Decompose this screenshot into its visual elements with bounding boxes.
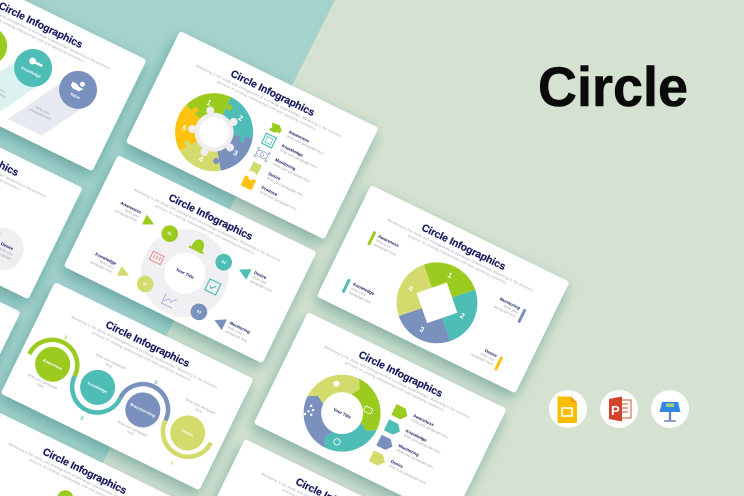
- step numbers: 3: [153, 379, 158, 386]
- circle: desire: [164, 410, 211, 456]
- card: desire circle partial: [0, 91, 83, 299]
- label: desire: Desire: [484, 348, 498, 358]
- label: awareness: Write your: [124, 208, 141, 219]
- label: knowledge: Write your: [350, 286, 367, 297]
- card subtitle: [258, 472, 408, 496]
- captions: here: [195, 407, 203, 414]
- label: desire: paragraph here: [249, 279, 273, 293]
- circle: knowledge: Knowledge: [87, 380, 109, 395]
- label: awareness: paragraph here: [373, 243, 397, 257]
- label: monitoring: Monitoring: [398, 443, 420, 457]
- captions: Write your paragraph: [185, 397, 216, 415]
- triangle: knowledge: [117, 266, 132, 281]
- card title: Circle Infographics: [41, 447, 128, 496]
- label: monitoring: Write your: [503, 304, 519, 315]
- legend: monitoring: Monitoring: [274, 157, 297, 171]
- step 01: 01: [167, 230, 174, 237]
- label: knowledge: Knowledge: [352, 282, 376, 296]
- circle: desire: Desire: [181, 428, 195, 438]
- label: awareness: Awareness: [377, 234, 400, 248]
- label: monitoring: Write your paragraph here: [396, 448, 434, 469]
- label: knowledge: paragraph here: [348, 291, 372, 305]
- icon: camera: [269, 122, 283, 135]
- puzzle ring chart: 4: [197, 154, 206, 164]
- icon: check box: [205, 279, 221, 295]
- step numbers: 1: [63, 334, 68, 341]
- gray circle: [0, 221, 31, 277]
- card title: Circle Infographics: [420, 223, 507, 273]
- card subtitle: Marketing is the study and management of exchange relationships. Marketing is the business: [324, 345, 471, 420]
- captions: here: [37, 382, 45, 389]
- label: awareness: Awareness: [412, 413, 435, 428]
- legend: desire: Desire: [268, 171, 282, 182]
- circle: brainstorming: Brainstorming: [129, 402, 157, 418]
- icon: Google Slides: [549, 390, 587, 428]
- step 01: [159, 223, 181, 245]
- tag: desire: [369, 450, 387, 468]
- card subtitle: Marketing is the study and management of exchange relationships. Marketing is the business: [134, 188, 281, 263]
- step 02: 02: [142, 281, 149, 287]
- circle: knowledge: [74, 364, 121, 411]
- triangle marker: [0, 225, 3, 239]
- label: knowledge: Write your paragraph here: [403, 433, 441, 455]
- snake line: [18, 331, 222, 465]
- bar: desire: [494, 356, 503, 371]
- label: awareness: [115, 200, 143, 223]
- icon: Keynote: [651, 390, 689, 428]
- legend: knowledge: Write your paragraph here: [279, 148, 318, 170]
- captions: Write your paragraph: [117, 420, 148, 438]
- card: snake path: [1, 282, 254, 490]
- circle: knowledge: Knowledge: [20, 65, 43, 79]
- label: monitoring: Write your: [227, 325, 244, 336]
- card subtitle: Marketing is the study and management of exchange relationships. Marketing is the business: [387, 218, 534, 293]
- puzzle ring chart: [162, 80, 266, 184]
- band captions: [0, 81, 54, 121]
- triangle: desire: [236, 264, 252, 280]
- card subtitle: Marketing is the study and management of exchange relationships. Marketing is the business: [71, 315, 218, 390]
- label: awareness: Write your: [375, 239, 392, 250]
- arrow ring chart: Your Title: [332, 407, 352, 420]
- card: rotary cycle: [64, 155, 317, 363]
- legend: awareness: Write your paragraph here: [286, 134, 324, 156]
- icon: box: [241, 175, 256, 190]
- icon: bell: [189, 237, 208, 254]
- gray ring with center title: [126, 214, 244, 332]
- pie chart: 3: [418, 324, 426, 334]
- label: monitoring: paragraph here: [493, 305, 517, 319]
- green circle: [55, 487, 76, 496]
- step 04: 04: [221, 259, 228, 266]
- pie chart: 1: [446, 270, 454, 280]
- bar: knowledge: [342, 278, 351, 293]
- band captions: Write your: [35, 105, 52, 116]
- label: knowledge: Knowledge: [94, 251, 118, 266]
- card title: Circle Infographics: [229, 69, 316, 119]
- card title: Circle Infographics: [357, 350, 444, 400]
- circle: awareness: [29, 341, 76, 388]
- step numbers: 2: [79, 415, 85, 422]
- circle: value: Value: [69, 91, 82, 101]
- label: monitoring: Monitoring: [499, 296, 521, 311]
- card subtitle: Marketing is the study and management of exchange relationships. Marketing is the business: [196, 64, 343, 139]
- label: monitoring: [493, 296, 522, 319]
- step 03: 03: [196, 308, 203, 315]
- card: three circles with shadows: [0, 0, 147, 171]
- label: awareness: [373, 234, 401, 257]
- step numbers: [34, 334, 204, 467]
- label: desire: [470, 343, 499, 367]
- label: desire: [249, 270, 277, 293]
- captions: Write your paragraph: [95, 353, 126, 371]
- card: bottom left: [0, 409, 191, 496]
- card title: Circle Infographics: [104, 320, 191, 370]
- icon: red bars: [149, 251, 164, 265]
- captions: Write your paragraph: [27, 373, 58, 391]
- label: desire: Desire: [253, 270, 268, 280]
- band captions: paragraph here: [28, 107, 52, 121]
- card: bottom center: [191, 439, 444, 496]
- puzzle ring chart: 2: [237, 113, 244, 123]
- desire label: Desire: [0, 241, 15, 252]
- pie chart: 2: [459, 311, 466, 321]
- card subtitle: process of creating relationships with and satisfying customers.: [345, 361, 445, 413]
- long shadow bands: [0, 27, 93, 149]
- legend: desire: Write your paragraph here: [266, 176, 304, 197]
- card subtitle: process of creating relationships with and satisfying customers.: [92, 331, 192, 383]
- legend: monitoring: Write your paragraph here: [272, 162, 311, 184]
- bar: awareness: [367, 231, 376, 246]
- label: monitoring: [225, 320, 253, 343]
- step 04: [213, 251, 235, 273]
- captions: [24, 330, 217, 464]
- icon: badge: [249, 162, 262, 175]
- triangle: awareness: [142, 215, 157, 229]
- icon: eye network: [254, 147, 271, 162]
- circle: awareness: [0, 21, 14, 71]
- circle: value: [53, 64, 103, 115]
- card: puzzle ring: [126, 31, 379, 239]
- circle: brainstorming: [119, 387, 166, 433]
- captions: here: [105, 362, 113, 369]
- legend: produce: Write your paragraph here: [259, 190, 297, 211]
- circle: knowledge: [8, 43, 59, 93]
- label: knowledge: Knowledge: [405, 428, 428, 443]
- pie chart: 4: [407, 283, 415, 294]
- step 03: [188, 301, 210, 323]
- card: partial far left: [0, 215, 21, 423]
- label: awareness: Awareness: [120, 200, 143, 215]
- legend: produce: Produce: [261, 185, 279, 197]
- step numbers: 4: [169, 460, 174, 467]
- icon: presentation frame: [262, 133, 276, 148]
- icon: PowerPoint: [600, 390, 638, 428]
- label: desire: Write your: [251, 275, 268, 286]
- card: arrow ring: [254, 312, 507, 496]
- puzzle ring chart: 1: [205, 98, 213, 108]
- label: knowledge: Write your: [99, 259, 116, 270]
- legend: knowledge: Knowledge: [281, 143, 304, 158]
- background teal panel: [0, 0, 335, 496]
- captions: here: [126, 430, 135, 436]
- label: desire: Write your: [479, 352, 496, 363]
- icon: PowerPoint: P: [611, 403, 620, 418]
- card subtitle: process of creating relationships with and satisfying customers.: [155, 204, 255, 256]
- tag: monitoring: [376, 435, 395, 452]
- card subtitle: [0, 124, 47, 203]
- gray ring with center title: Your Title: [175, 267, 195, 280]
- tag: awareness: [391, 404, 410, 422]
- pie chart: [383, 249, 491, 357]
- puzzle ring chart: 3: [232, 148, 239, 158]
- step 02: [134, 273, 156, 295]
- card title: Circle Infographics: [167, 193, 254, 243]
- arrow ring chart: [291, 362, 394, 465]
- card subtitle: process of creating relationships with and satisfying customers.: [408, 234, 508, 286]
- circle: awareness: Awareness: [42, 357, 64, 372]
- legend: awareness: Awareness: [288, 129, 311, 144]
- label: monitoring: Monitoring: [229, 320, 251, 335]
- bar: monitoring: [517, 308, 527, 323]
- icon: line chart: [162, 293, 177, 308]
- desire label: [0, 241, 17, 261]
- label: awareness: paragraph here: [115, 209, 138, 223]
- card subtitle: process of creating relationships with and satisfying customers.: [217, 80, 317, 132]
- puzzle ring chart: 5: [181, 123, 188, 133]
- label: desire: Desire: [390, 459, 405, 469]
- triangle: monitoring: [212, 315, 227, 330]
- label: desire: paragraph here: [470, 352, 494, 366]
- label: knowledge: paragraph here: [90, 260, 113, 274]
- tag: knowledge: [384, 419, 403, 437]
- label: monitoring: paragraph here: [225, 329, 248, 343]
- label: knowledge: [90, 251, 118, 274]
- label: desire: Write your paragraph here: [388, 464, 426, 485]
- main title: Circle: [538, 55, 688, 118]
- label: knowledge: [348, 282, 376, 305]
- label: awareness: Write your paragraph here: [410, 418, 449, 439]
- card: square pie: [317, 185, 570, 393]
